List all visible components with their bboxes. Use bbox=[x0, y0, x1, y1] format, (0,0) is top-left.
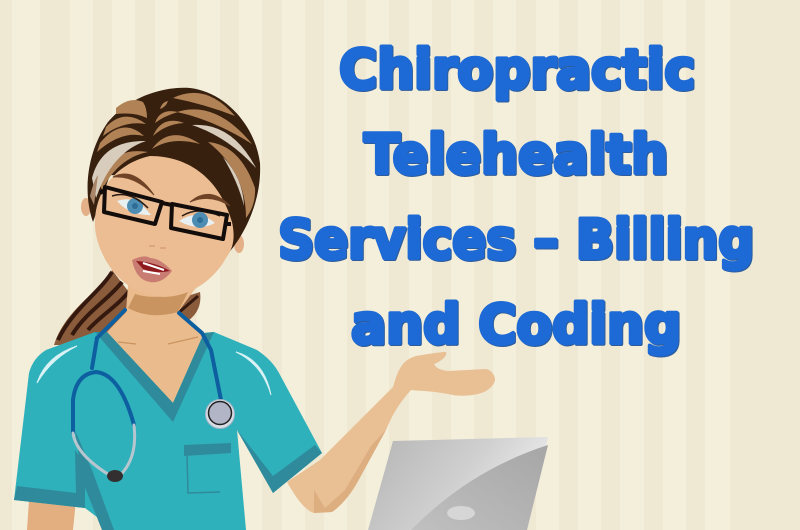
ponytail bbox=[54, 270, 200, 345]
title: Telehealth bbox=[365, 124, 669, 187]
title: Services – Billing bbox=[279, 209, 755, 272]
hair strands bbox=[90, 93, 256, 218]
nose bbox=[149, 246, 166, 248]
hair back bbox=[88, 88, 260, 256]
glasses bbox=[100, 187, 231, 239]
title: Chiropractic bbox=[339, 38, 695, 101]
title: Chiropractic bbox=[340, 39, 696, 102]
mouth bbox=[132, 256, 172, 282]
head bbox=[81, 88, 260, 297]
title: Telehealth bbox=[364, 123, 668, 186]
scrubs top bbox=[14, 332, 322, 530]
scrub trim bbox=[14, 332, 322, 530]
title: and Coding bbox=[352, 294, 682, 357]
eyebrows bbox=[113, 174, 230, 206]
laptop bbox=[368, 437, 548, 530]
sleeve highlights bbox=[37, 346, 271, 395]
ears bbox=[81, 198, 91, 216]
stethoscope bbox=[73, 310, 234, 482]
title: and Coding bbox=[351, 293, 681, 356]
pocket bbox=[187, 456, 220, 493]
neck bbox=[107, 285, 204, 405]
nurse figure bbox=[14, 88, 495, 530]
eyes bbox=[112, 194, 220, 228]
left arm bbox=[27, 500, 76, 530]
face bbox=[95, 156, 234, 297]
title bbox=[278, 38, 755, 357]
right arm and hand bbox=[287, 352, 495, 513]
title: Services – Billing bbox=[278, 208, 754, 271]
